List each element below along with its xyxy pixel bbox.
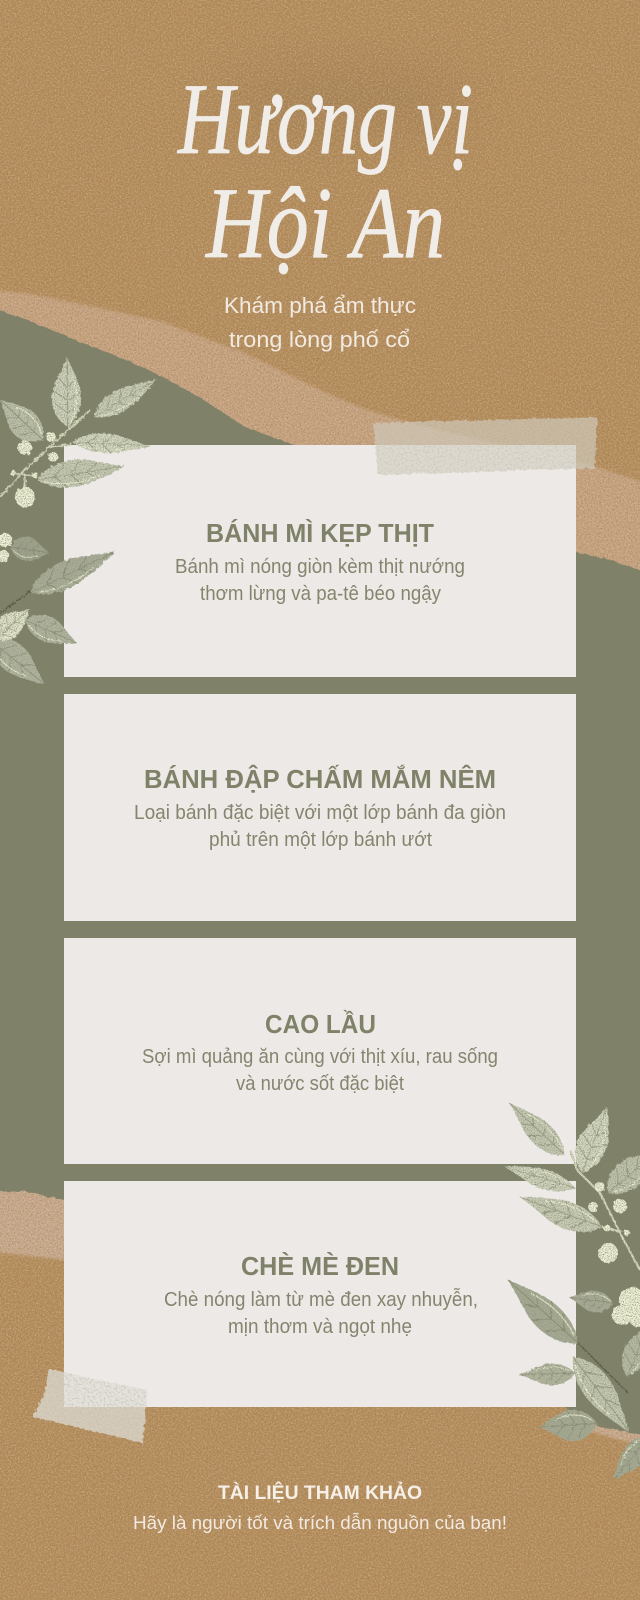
card 4 text — [164, 1251, 478, 1338]
card 4 text: Chè nóng làm từ mè đen xay nhuyễn, — [164, 1288, 478, 1311]
card 1 panel — [64, 445, 576, 677]
footer — [133, 1482, 507, 1533]
card 4 text: CHÈ MÈ ĐEN — [241, 1251, 399, 1281]
card 4 panel — [64, 1181, 576, 1407]
tape top right — [373, 417, 597, 475]
torn pink paper band bottom — [0, 1180, 640, 1447]
card 2 text: Loại bánh đặc biệt với một lớp bánh đa giòn — [134, 802, 506, 824]
title: Hương vị — [176, 63, 473, 176]
card 2 text — [134, 764, 506, 851]
card 3 text: và nước sốt đặc biệt — [236, 1073, 404, 1095]
card 2 text: BÁNH ĐẬP CHẤM MẮM NÊM — [144, 764, 496, 794]
footer: TÀI LIỆU THAM KHẢO — [218, 1482, 422, 1504]
title — [176, 63, 473, 280]
card 4 text: mịn thơm và ngọt nhẹ — [228, 1316, 412, 1338]
card 2 text: phủ trên một lớp bánh ướt — [209, 829, 432, 851]
subtitle: trong lòng phố cổ — [229, 327, 410, 352]
subtitle: Khám phá ẩm thực — [224, 293, 416, 318]
card 2 panel — [64, 694, 576, 921]
card 3 panel — [64, 938, 576, 1164]
card 1 text: thơm lừng và pa-tê béo ngậy — [200, 583, 441, 605]
card 3 text — [142, 1009, 498, 1095]
tape bottom left — [33, 1369, 147, 1443]
botanical sprig left lower — [0, 533, 121, 695]
torn pink paper band top — [0, 290, 640, 600]
card 3 text: Sợi mì quảng ăn cùng với thịt xíu, rau sống — [142, 1046, 498, 1068]
botanical sprig top left — [0, 357, 163, 507]
card 1 text: Bánh mì nóng giòn kèm thịt nướng — [175, 556, 465, 578]
card 1 text: BÁNH MÌ KẸP THỊT — [206, 518, 434, 548]
title: Hội An — [204, 167, 445, 280]
card 3 text: CAO LẦU — [265, 1009, 376, 1039]
botanical sprig bottom right — [497, 1095, 640, 1488]
card 1 text — [175, 518, 465, 605]
subtitle — [224, 293, 416, 352]
olive green background shape — [0, 308, 640, 1436]
footer: Hãy là người tốt và trích dẫn nguồn của bạn! — [133, 1512, 507, 1533]
